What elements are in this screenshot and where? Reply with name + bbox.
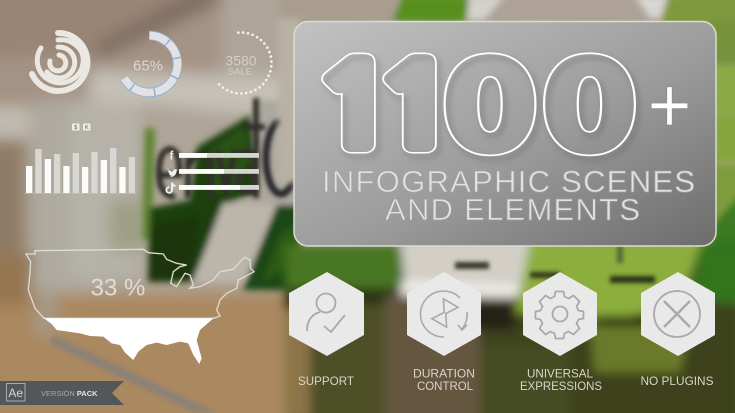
Ae badge: Ae	[8, 386, 23, 400]
dotted progress ring: 3580 sale	[208, 30, 274, 96]
map fill: 33%	[44, 318, 213, 364]
sale number: 3580	[225, 52, 257, 68]
icon: radial ring chart	[32, 33, 87, 91]
headline digits 1100	[321, 52, 641, 162]
donut chart: 65%	[120, 35, 178, 93]
subtitle line 1: INFOGRAPHIC SCENES	[322, 164, 695, 199]
subtitle line 2: AND ELEMENTS	[385, 192, 640, 227]
US map chart	[26, 249, 254, 364]
label: SUPPORT	[298, 374, 355, 388]
feature: duration control	[407, 272, 481, 393]
feature: no plugins	[640, 272, 715, 388]
facebook bar	[179, 153, 259, 158]
feature: support	[289, 272, 364, 388]
social progress bars	[166, 148, 259, 193]
label: NO PLUGINS	[640, 374, 714, 388]
label: UNIVERSAL	[527, 366, 593, 380]
icon: facebook: f	[170, 148, 174, 162]
legend chips	[72, 124, 90, 131]
feature: duration control: CONTROL	[417, 379, 473, 393]
version pack ribbon	[0, 381, 124, 405]
map outline	[26, 249, 254, 318]
panel: 1100+ headline	[290, 20, 720, 250]
ribbon label: VERSION PACK	[41, 389, 98, 398]
icon: tiktok	[166, 182, 176, 193]
bar chart	[24, 148, 137, 194]
icon: twitter	[167, 168, 178, 177]
tiktok bar	[179, 185, 259, 190]
legend chips: $	[74, 125, 77, 131]
twitter bar	[179, 169, 259, 174]
feature: universal expressions	[520, 272, 602, 393]
headline plus: +	[648, 61, 692, 149]
icon: gear	[536, 292, 584, 338]
hexagon	[289, 272, 364, 356]
map value: 33 %	[91, 275, 145, 302]
label: DURATION	[413, 366, 475, 380]
icon: hourglass	[420, 291, 467, 337]
icon: cross in circle	[654, 291, 700, 337]
legend chips: K	[85, 125, 89, 131]
donut value: 65%	[133, 58, 163, 74]
icon: user check	[307, 294, 345, 332]
sale label: SALE	[228, 66, 252, 78]
feature: universal expressions: EXPRESSIONS	[520, 379, 602, 393]
